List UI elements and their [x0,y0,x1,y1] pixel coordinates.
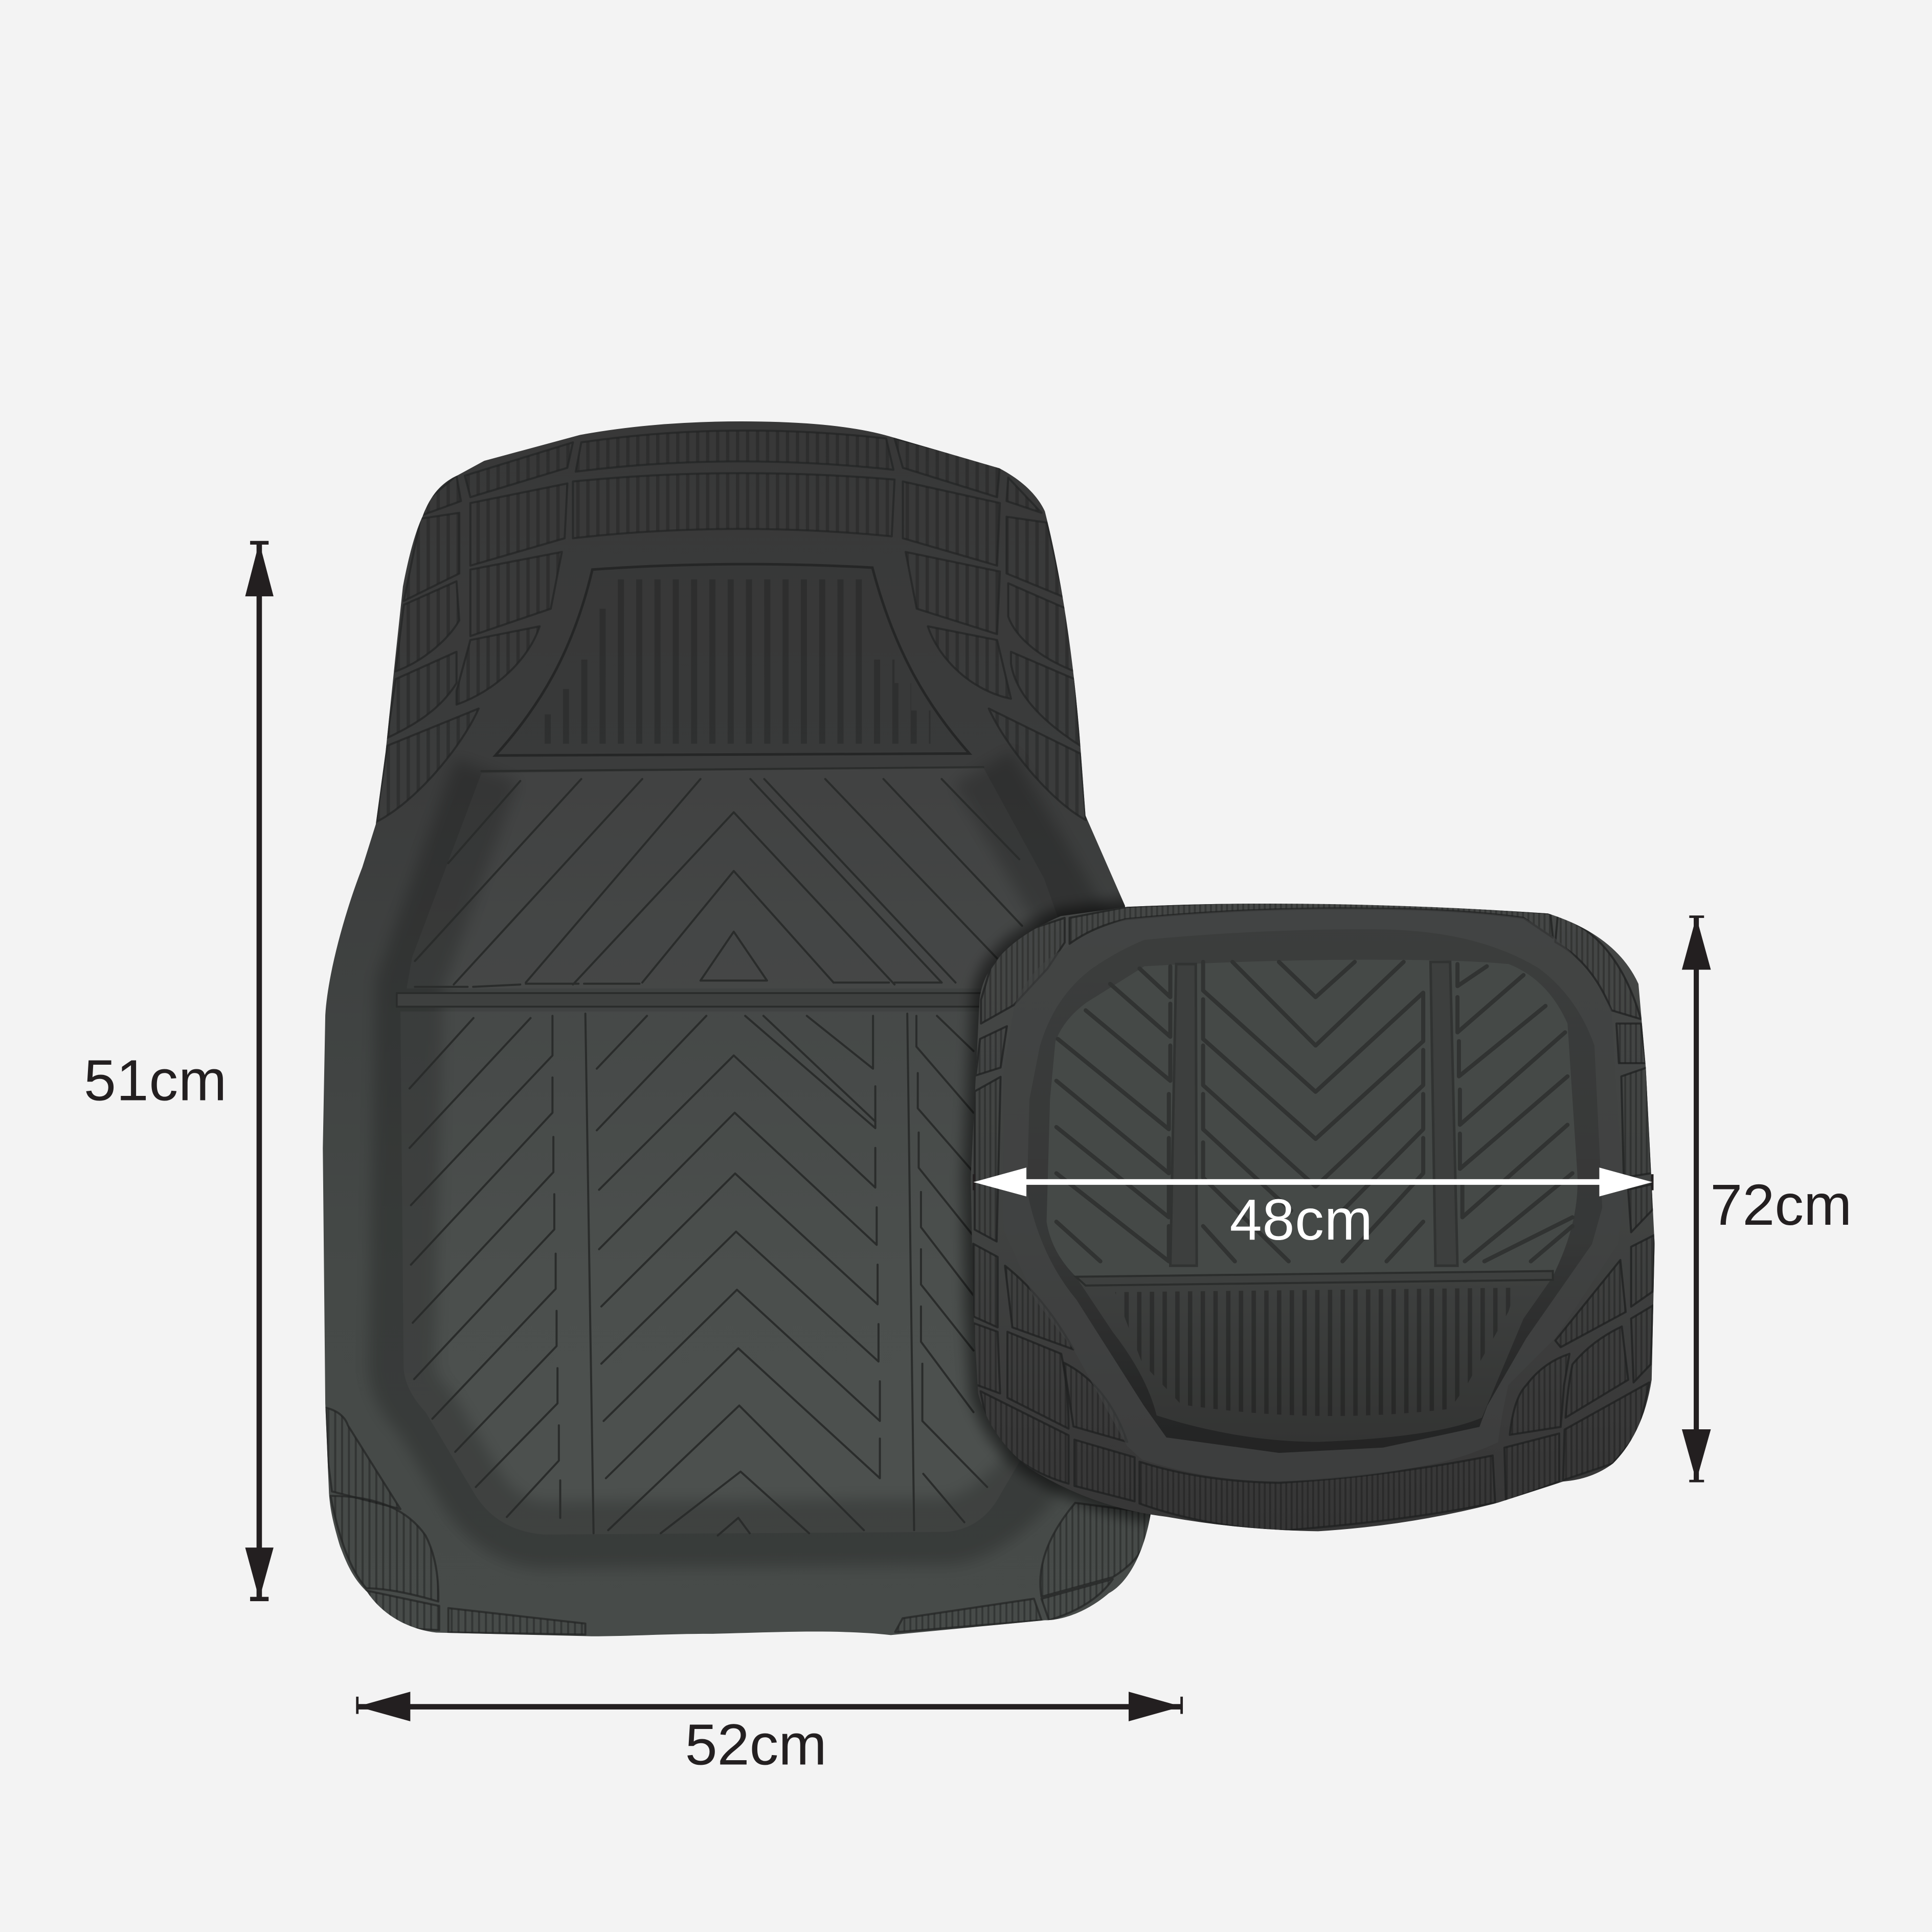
large front mat [323,421,1152,1636]
label: 51cm: 51cm [84,1048,227,1113]
small mat right diagonal grooves [1457,964,1572,1262]
large mat trough shadow [401,768,1109,1535]
label: 72cm: 72cm [1710,1172,1852,1237]
shadow of small mat on large mat [971,904,1655,1531]
dimension arrow: 72cm height [1682,915,1711,1482]
dimension arrow: 51cm height [245,541,274,1601]
dimension arrow: 48cm width (white) [973,1167,1653,1197]
bottom right rib panels [895,1503,1151,1632]
small mat chevron field [1047,960,1578,1277]
small mat chevron grooves [1203,962,1423,1262]
small mat lower zone [1076,1277,1553,1442]
infographic: car mat dimensions [86,421,1848,1765]
small mat divider bar [1076,1271,1553,1286]
tread rib panels, top of large mat [376,431,1086,822]
left diagonal grooves [410,1016,560,1518]
heel trapezoid with vertical ribs [481,564,983,771]
divider bar between fields [397,993,1062,1007]
small mat left diagonal grooves [1057,967,1171,1262]
bottom left rib panels [326,1408,586,1634]
centre chevron grooves [597,1016,880,1536]
left vertical bar [586,1014,594,1533]
large mat body [323,421,1152,1636]
small mat vertical bars [1171,962,1457,1266]
upper chevron field [407,767,1083,989]
small mat lower ribs [1115,1288,1516,1416]
small mat body [971,904,1655,1531]
lower chevron field [326,1012,1023,1634]
right diagonal grooves [916,1016,987,1522]
small mat raised lip [1003,908,1623,1481]
small mat trough [1027,929,1602,1453]
right vertical bar [907,1014,914,1530]
dimension arrow: 52cm width [356,1692,1183,1721]
label: 48cm: 48cm [1230,1187,1373,1252]
small mat edge rib panels [973,903,1655,1531]
label: 52cm: 52cm [685,1712,827,1777]
small rear mat [971,903,1655,1531]
